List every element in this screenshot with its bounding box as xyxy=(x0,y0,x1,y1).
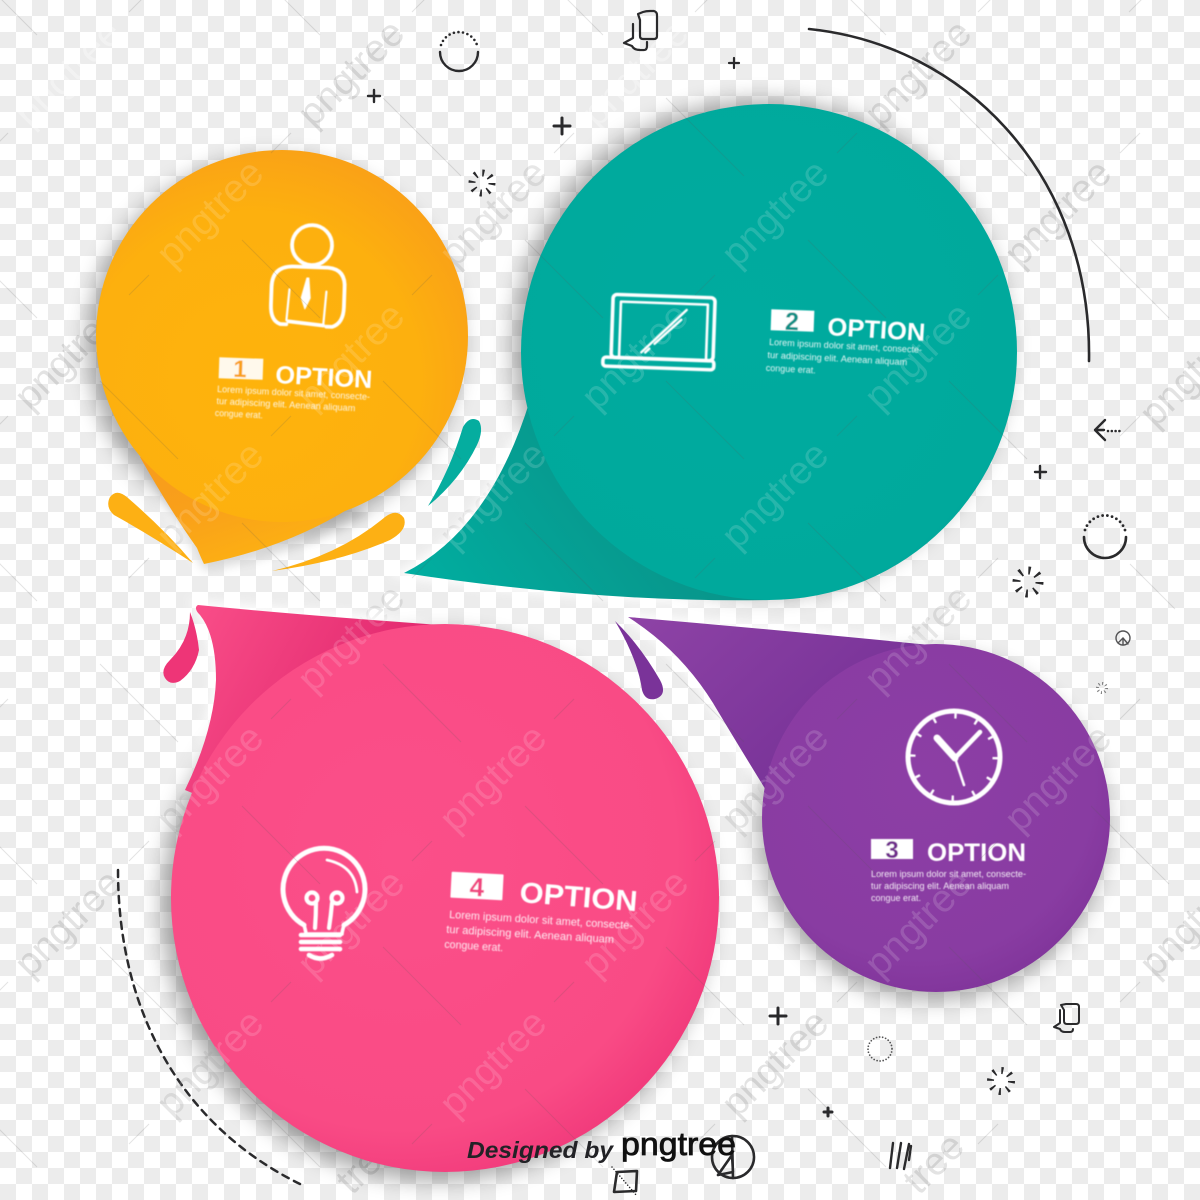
watermark layer: background pngtree marks: pngtree xyxy=(148,716,272,840)
decorative dashed arc bottom left xyxy=(118,870,300,1184)
option 2 heading: 2 xyxy=(784,308,799,336)
option 3 heading: 3 xyxy=(885,837,899,864)
pink splash drop xyxy=(163,612,199,683)
watermark layer: marks over bubbles: pngtree xyxy=(713,151,837,275)
icon: person with tie xyxy=(270,224,347,327)
watermark layer: background pngtree marks: pngtree xyxy=(573,11,697,135)
option 3 description: Lorem ipsum dolor sit amet, consecte- xyxy=(871,869,1026,879)
option 1 heading: 1 xyxy=(233,356,247,383)
option 3 heading xyxy=(871,837,1026,867)
watermark layer: marks over bubbles: pngtree xyxy=(573,861,697,985)
icon: peace dial bottom xyxy=(712,1136,754,1178)
icon: light bulb xyxy=(283,848,365,958)
watermark layer: marks over bubbles: pngtree xyxy=(431,1001,555,1125)
option 1 description: Lorem ipsum dolor sit amet, consecte- xyxy=(217,384,370,402)
decorative large arc top right xyxy=(809,29,1089,361)
watermark layer: marks over bubbles: pngtree xyxy=(713,433,837,557)
purple splash drop xyxy=(615,621,663,699)
option 1 description: congue erat. xyxy=(215,408,263,420)
icon: dotted arrow xyxy=(1095,420,1120,440)
option 4 heading: OPTION xyxy=(518,877,639,918)
icon: chat bubbles bottom xyxy=(1054,1004,1079,1032)
option 2 heading xyxy=(771,308,926,347)
watermark layer: marks over bubbles: pngtree xyxy=(289,294,413,418)
option 2 heading: OPTION xyxy=(827,313,926,347)
option 1 heading: OPTION xyxy=(275,361,373,394)
icons: sparks xyxy=(472,173,1106,1092)
watermark layer: background pngtree marks: pngtree xyxy=(996,716,1120,840)
watermark layer: marks over bubbles: pngtree xyxy=(148,433,272,557)
watermark layer: background pngtree marks: pngtree xyxy=(713,1001,837,1125)
teal bubble circle xyxy=(521,104,1017,600)
icon: dotted circle xyxy=(868,1037,892,1061)
credit: designed by pngtree xyxy=(467,1126,736,1163)
option 3 description: congue erat. xyxy=(871,893,921,903)
watermark layer: background pngtree marks: pngtree xyxy=(713,716,837,840)
watermark layer: background pngtree marks: pngtree xyxy=(289,576,413,700)
icon: diamond with dotted line xyxy=(612,1167,637,1196)
pink bubble circle xyxy=(171,624,719,1172)
option 1 description xyxy=(215,384,370,426)
icon: chat bubbles top xyxy=(624,11,657,50)
credit: designed by pngtree: Designed by xyxy=(467,1137,614,1163)
watermark layer: marks over bubbles: pngtree xyxy=(431,433,555,557)
option 1 heading xyxy=(219,356,373,394)
icon: laptop xyxy=(603,294,716,370)
option 4 heading xyxy=(450,872,639,918)
teal splash drop xyxy=(428,419,481,506)
watermark layer: background pngtree marks: pngtree xyxy=(996,151,1120,275)
orange bubble tail xyxy=(140,400,350,564)
option 2 description xyxy=(766,337,922,381)
watermark layer: background pngtree marks: pngtree xyxy=(431,151,555,275)
option 3 description: tur adipiscing elit. Aenean aliquam xyxy=(871,881,1009,891)
soft white glow behind bubbles xyxy=(140,350,936,898)
watermark layer: marks over bubbles: pngtree xyxy=(148,1001,272,1125)
pink bubble tail xyxy=(185,605,445,898)
option 4 description: tur adipiscing elit. Aenean aliquam xyxy=(446,924,614,946)
panel: option 3 purple bubble xyxy=(615,617,1110,1001)
option 4 description xyxy=(444,909,634,962)
orange bubble circle xyxy=(96,150,468,522)
purple bubble circle xyxy=(762,644,1110,992)
watermark layer: marks over bubbles: pngtree xyxy=(856,294,980,418)
watermark layer: background pngtree marks: pngtree xyxy=(431,433,555,557)
watermark layer: marks over bubbles: pngtree xyxy=(573,294,697,418)
purple bubble tail xyxy=(628,617,936,818)
watermark layer: marks over bubbles: pngtree xyxy=(289,576,413,700)
watermark layer: marks over bubbles: pngtree xyxy=(996,716,1120,840)
option 4 description: congue erat. xyxy=(444,939,504,954)
option 2 description: congue erat. xyxy=(766,363,816,375)
watermark layer: background pngtree marks: pngtree xyxy=(6,861,130,985)
icon: stripe bars xyxy=(890,1143,911,1169)
watermark layer: marks over bubbles: pngtree xyxy=(856,861,980,985)
watermark layer: marks over bubbles: pngtree xyxy=(713,716,837,840)
icon: half dotted ring top xyxy=(440,32,478,71)
teal bubble tail xyxy=(404,350,770,600)
watermark layer: background pngtree marks: pngtree xyxy=(289,11,413,135)
panel: option 4 pink bubble xyxy=(162,605,719,1181)
panel: option 2 teal bubble xyxy=(404,100,1017,600)
watermark layer: marks over bubbles xyxy=(148,151,1120,1125)
watermark layer: marks over bubbles: pngtree xyxy=(856,576,980,700)
option 2 description: tur adipiscing elit. Aenean aliquam xyxy=(767,350,908,367)
icon: clock xyxy=(908,711,1000,803)
watermark layer: background pngtree marks: pngtree xyxy=(856,576,980,700)
option 1 description: tur adipiscing elit. Aenean aliquam xyxy=(216,396,356,413)
watermark layer: marks over bubbles: pngtree xyxy=(148,151,272,275)
credit: designed by pngtree: pngtree xyxy=(621,1126,736,1162)
watermark layer: marks over bubbles: pngtree xyxy=(148,716,272,840)
watermark layer: background pngtree marks: pngtree xyxy=(148,151,272,275)
watermark layer: background pngtree marks: pngtree xyxy=(6,11,130,135)
option 3 description xyxy=(871,869,1026,903)
icon: half dotted ring right xyxy=(1084,515,1126,558)
watermark layer: background pngtree marks: pngtree xyxy=(6,294,130,418)
option 3 heading: OPTION xyxy=(927,839,1026,867)
panel: option 1 orange bubble xyxy=(88,150,468,571)
icons: plus signs xyxy=(368,58,1046,1116)
watermark layer: background pngtree marks: pngtree xyxy=(856,11,980,135)
option 4 heading: 4 xyxy=(469,872,485,902)
watermark layer: marks over bubbles: pngtree xyxy=(431,716,555,840)
option 2 description: Lorem ipsum dolor sit amet, consecte- xyxy=(769,337,922,355)
watermark layer: background pngtree marks: pngtree xyxy=(148,1001,272,1125)
watermark layer: marks over bubbles: pngtree xyxy=(431,151,555,275)
watermark layer: marks over bubbles: pngtree xyxy=(289,861,413,985)
option 4 description: Lorem ipsum dolor sit amet, consecte- xyxy=(449,909,634,932)
icon: small peace dial xyxy=(1116,631,1130,645)
watermark layer: background pngtree marks: pngtree xyxy=(148,433,272,557)
orange splash drops xyxy=(108,493,405,571)
